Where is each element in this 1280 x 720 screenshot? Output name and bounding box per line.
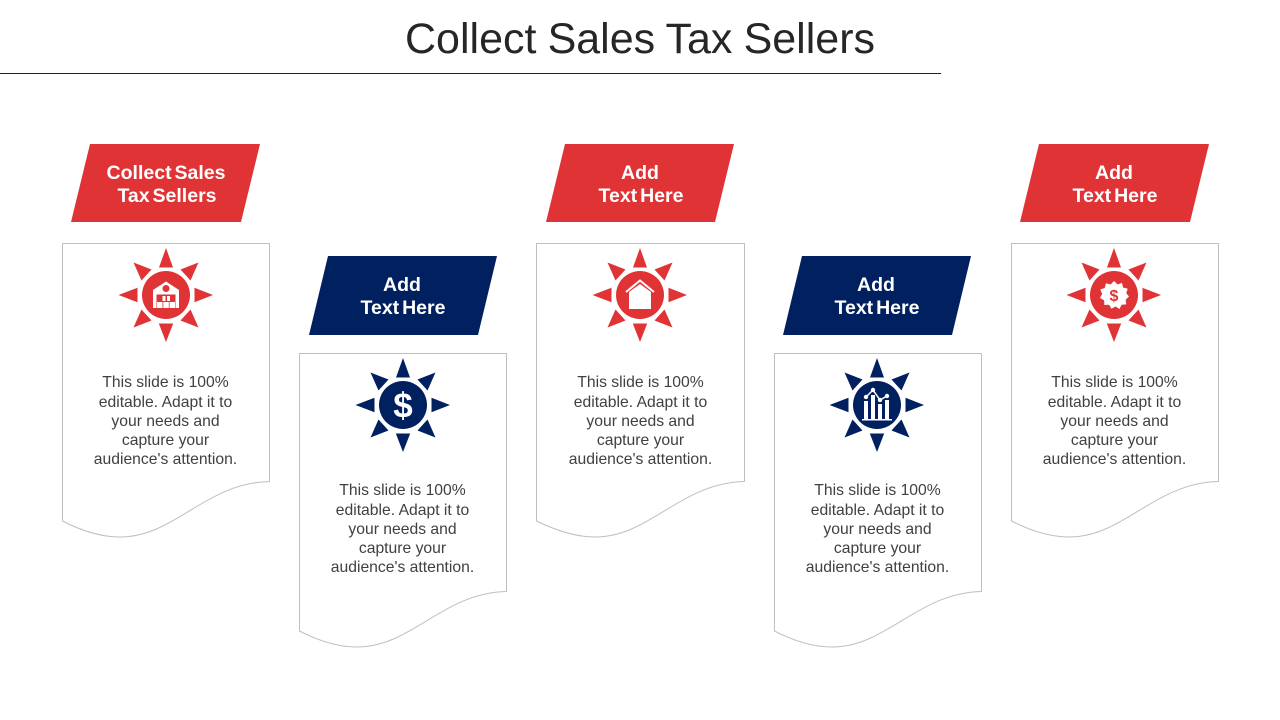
text block: editable. Adapt it to — [1048, 394, 1181, 411]
banner: Add Text Here: Text Here — [835, 297, 920, 319]
card outline — [300, 354, 506, 647]
text block: This slide is 100% — [102, 374, 229, 391]
icon: dollar sun: $ — [393, 386, 413, 426]
text block: your needs and — [823, 521, 932, 538]
text block: audience's attention. — [94, 451, 237, 468]
text block: editable. Adapt it to — [336, 502, 469, 519]
text block: audience's attention. — [806, 559, 949, 576]
card outline — [62, 244, 270, 537]
text block — [806, 482, 949, 576]
text block: editable. Adapt it to — [99, 394, 232, 411]
text block: This slide is 100% — [339, 482, 466, 499]
panel: column 3 house — [536, 144, 744, 537]
banner: Add Text Here: Text Here — [1073, 185, 1158, 207]
icon: house sun — [592, 248, 687, 342]
panel: column 4 chart — [774, 256, 982, 647]
icon: dollar badge sun: $ — [1110, 288, 1119, 305]
panel: column 1 warehouse — [62, 144, 270, 537]
text block: your needs and — [586, 413, 695, 430]
banner: Add Text Here: Text Here — [599, 185, 684, 207]
banner: Add Text Here: Text Here — [361, 297, 446, 319]
banner: Collect Sales Tax Sellers — [71, 144, 260, 222]
banner: Add Text Here — [1020, 144, 1209, 222]
text block: editable. Adapt it to — [811, 502, 944, 519]
banner: Add Text Here: Add — [857, 274, 895, 296]
text block: editable. Adapt it to — [574, 394, 707, 411]
icon: warehouse sun — [118, 248, 213, 342]
icon: dollar badge sun — [1066, 248, 1161, 342]
text block — [569, 374, 712, 468]
text block: capture your — [834, 540, 921, 557]
text block: audience's attention. — [331, 559, 474, 576]
panel: column 5 badge — [1012, 144, 1218, 537]
text block: audience's attention. — [569, 451, 712, 468]
icon: dollar sun — [356, 358, 450, 452]
text block — [331, 482, 474, 576]
text block: This slide is 100% — [814, 482, 941, 499]
panel: column 2 dollar — [300, 256, 506, 647]
text block: capture your — [597, 432, 684, 449]
text block: This slide is 100% — [1051, 374, 1178, 391]
text block: capture your — [1071, 432, 1158, 449]
text block: your needs and — [111, 413, 220, 430]
icon: bar chart sun — [830, 358, 924, 452]
banner: Add Text Here: Add — [1095, 162, 1133, 184]
text block: your needs and — [1060, 413, 1169, 430]
text block — [94, 374, 237, 468]
card outline — [1012, 244, 1218, 537]
text block: audience's attention. — [1043, 451, 1186, 468]
text block: capture your — [359, 540, 446, 557]
card outline — [536, 244, 744, 537]
banner: Collect Sales Tax Sellers: Tax Sellers — [117, 185, 217, 207]
text block — [1043, 374, 1186, 468]
banner: Add Text Here — [546, 144, 734, 222]
text block: your needs and — [348, 521, 457, 538]
banner: Add Text Here: Add — [383, 274, 421, 296]
banner: Add Text Here — [783, 256, 971, 335]
banner: Add Text Here: Add — [621, 162, 659, 184]
card outline — [774, 354, 982, 647]
banner: Collect Sales Tax Sellers: Collect Sales — [107, 162, 226, 184]
text block: This slide is 100% — [577, 374, 704, 391]
title: Collect Sales Tax Sellers — [405, 15, 875, 63]
banner: Add Text Here — [309, 256, 497, 335]
text block: capture your — [122, 432, 209, 449]
